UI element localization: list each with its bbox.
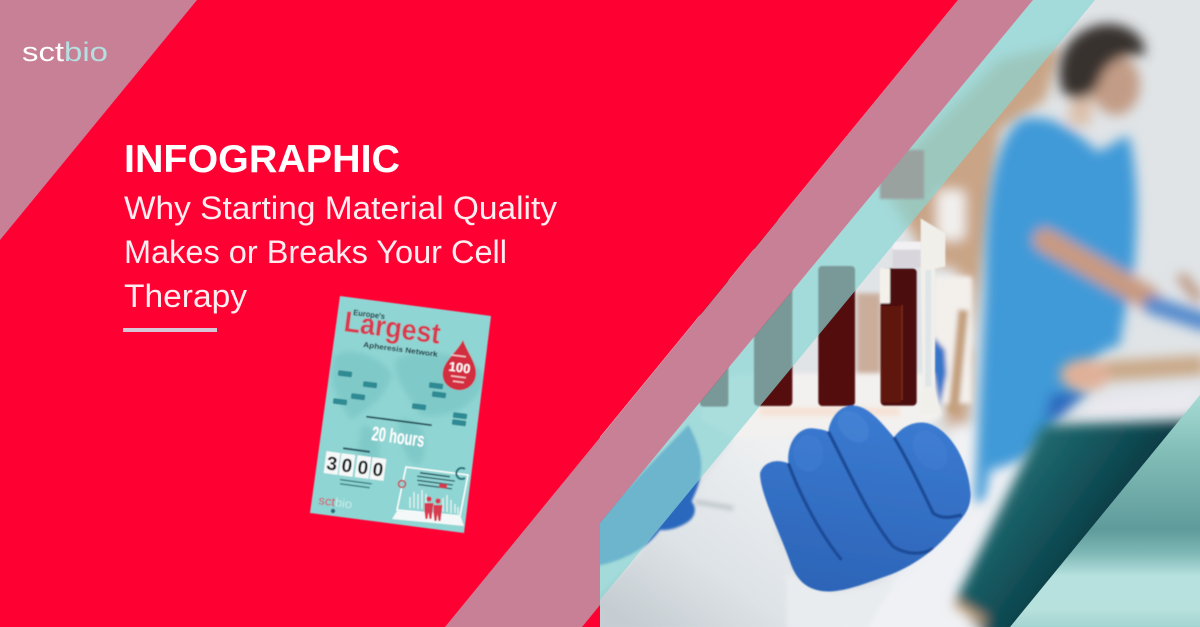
poster: Europe's Largest Apheresis Network thumbnail: Largest: [342, 306, 443, 351]
20 hours stat: [366, 416, 432, 452]
subtitle: Makes or Breaks Your Cell: [124, 234, 507, 270]
tube 2: [754, 220, 792, 406]
3000 counter: 0: [340, 455, 353, 478]
nurse figure: [975, 24, 1200, 510]
3000 counter: 3: [325, 453, 338, 476]
panel: teal bottom-right corner: [1010, 395, 1200, 627]
poster heading: Europe's: [353, 308, 386, 321]
icon: blood drop with 100: 100: [448, 359, 471, 376]
logo: sctbio: sct bio: [22, 37, 108, 67]
rack: [700, 373, 942, 438]
panel: red cover over photo edge: [600, 0, 958, 437]
3000 counter: [324, 447, 386, 488]
photo: clinician holding blood tubes: [597, 0, 1200, 627]
map location labels: [333, 370, 467, 426]
right gloved hand: [760, 406, 971, 592]
panel: pink diagonal band: [445, 0, 1033, 627]
tube 4: [881, 268, 917, 406]
icon: grey tube top seen through band: [880, 150, 924, 199]
panel: translucent teal diagonal band: [600, 0, 1095, 600]
poster logo: sctbio: [318, 493, 353, 511]
tube 3: [818, 266, 855, 406]
icon: rings: [398, 480, 406, 488]
20 hours stat: 20 hours: [370, 423, 426, 452]
tube 1: [700, 180, 728, 407]
laptop: [392, 467, 468, 526]
3000 counter: 0: [356, 457, 369, 480]
poster background: [310, 296, 491, 533]
blurred clinic background: [890, 42, 1064, 508]
wall behind tubes: [857, 293, 881, 377]
left glove: [597, 425, 701, 566]
back glove: [930, 337, 947, 407]
3000 counter: 0: [371, 459, 384, 482]
clear tube: [919, 218, 945, 413]
poster: Europe's Largest Apheresis Network thumbnail: [310, 296, 491, 533]
map of the world: [332, 352, 485, 474]
poster: Europe's Largest Apheresis Network thumbnail: Apheresis Network: [363, 340, 439, 359]
patient arm and bed: [1060, 359, 1200, 428]
lab coat: [597, 438, 800, 627]
foreground: rack, tubes, gloved hand: [597, 180, 972, 627]
panel: top-left pink corner: [0, 0, 197, 240]
subtitle: [124, 190, 557, 314]
white sheet: [868, 455, 1023, 627]
tube 4 cap: [892, 250, 921, 270]
title: INFOGRAPHIC: [124, 138, 400, 181]
icon: blood drop with 100: [443, 340, 476, 390]
icon: people: [424, 496, 442, 521]
subtitle: Therapy: [124, 278, 247, 314]
patient leg: [955, 420, 1200, 627]
subtitle: Why Starting Material Quality: [124, 190, 557, 226]
accent rule: [123, 328, 217, 332]
